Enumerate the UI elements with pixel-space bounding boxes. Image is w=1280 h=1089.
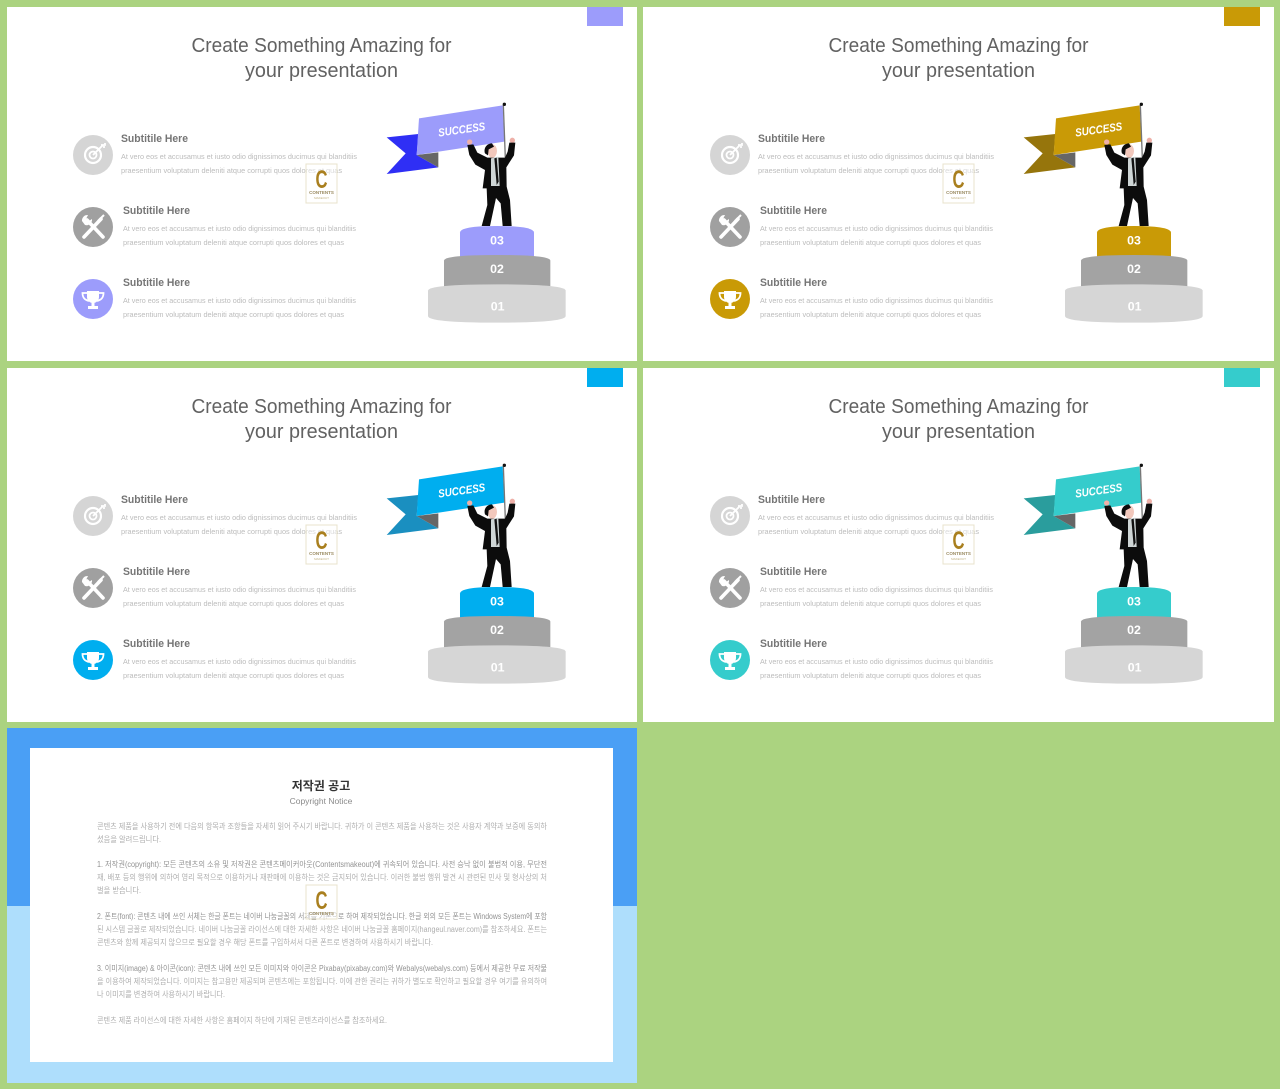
title: your presentation	[882, 60, 1035, 82]
text block: item 1	[758, 133, 994, 175]
person	[1104, 138, 1152, 226]
text block: item 2: praesentium voluptatum deleniti atque corrupti quos dolores et quas	[760, 599, 981, 608]
paragraph 2: font: 된 시스템 글꼴로 제작되었습니다. 네이버 나눔글꼴 라이선스에 대한 자세한 사항은 네이버 나눔글꼴 홈페이지(hangeul.naver.com)를 참조하세요. 폰트는	[97, 924, 547, 934]
step 03: 03	[490, 233, 504, 247]
text block: item 2: Subtitile Here	[123, 566, 190, 578]
watermark logo	[943, 164, 974, 203]
panel: slide 2 gold	[643, 7, 1274, 361]
notice heading	[290, 778, 353, 806]
illustration: podium with flag	[387, 103, 566, 323]
intro paragraph: 셨음을 알려드립니다.	[97, 834, 161, 844]
step 03	[460, 587, 534, 618]
panel: slide 4 teal	[643, 368, 1274, 722]
text block: item 2	[760, 205, 993, 247]
text block: item 2: At vero eos et accusamus et iusto odio dignissimos ducimus qui blanditiis	[760, 224, 993, 233]
title: your presentation	[245, 60, 398, 82]
paragraph 3: image and icon: 나 이미지를 변경하여 사용하시기 바랍니다.	[97, 989, 225, 999]
title	[828, 35, 1089, 82]
step 02: 02	[490, 262, 504, 276]
step 03	[1097, 587, 1171, 618]
text block: item 1: Subtitile Here	[758, 133, 825, 145]
panel: slide 3 blue	[7, 368, 637, 722]
person	[467, 138, 515, 226]
step 01	[1065, 284, 1203, 323]
flag	[1024, 464, 1143, 535]
text block: item 1: praesentium voluptatum deleniti atque corrupti quos dolores et quas	[758, 166, 979, 175]
text block: item 1	[121, 494, 357, 536]
step 03	[460, 226, 534, 257]
step 01: 01	[491, 300, 505, 314]
paragraph 1: copyright: 1. 저작권(copyright): 모든 콘텐츠의 소유 및 저작권은 콘텐츠메이커아웃(Contentsmakeout)에 귀속되어 있습니다. 사전 승낙 없이 불법적 이용, 무단전	[97, 859, 547, 869]
person	[1104, 499, 1152, 587]
text block: item 3: praesentium voluptatum deleniti atque corrupti quos dolores et quas	[760, 310, 981, 319]
paragraph 3: image and icon: 을 이용하여 제작되었습니다. 이미지는 참고용만 제공되며 콘텐츠에는 포함됩니다. 이에 관한 권리는 귀하가 별도로 확인하고 필요할 경우 여기를 유의하여	[97, 976, 547, 986]
step 02: 02	[490, 623, 504, 637]
step 03: 03	[1127, 594, 1141, 608]
text block: item 1: Subtitile Here	[121, 494, 188, 506]
text block: item 3	[760, 277, 993, 319]
title	[192, 396, 452, 443]
panel: slide 1 purple	[7, 7, 637, 361]
text block: item 3	[123, 638, 356, 680]
watermark logo: C	[316, 166, 328, 194]
icon: trophy	[710, 640, 750, 680]
watermark logo: C	[952, 166, 964, 194]
flag: SUCCESS	[1075, 121, 1123, 140]
watermark logo: C	[952, 527, 964, 555]
paragraph 3: image and icon: 3. 이미지(image) & 아이콘(icon): 콘텐츠 내에 쓰인 모든 이미지와 아이콘은 Pixabay(pixabay.com)와 Webalys(webalys.com) 등에서 제공한 무료 저작물	[97, 963, 547, 973]
title: Create Something Amazing for	[828, 396, 1089, 418]
watermark logo: CONTENTS	[309, 190, 334, 195]
text block: item 1: At vero eos et accusamus et iusto odio dignissimos ducimus qui blanditiis	[121, 152, 357, 161]
closing line: 콘텐츠 제품 라이선스에 대한 자세한 사항은 홈페이지 하단에 기재된 콘텐츠라이선스를 참조하세요.	[97, 1015, 387, 1025]
text block: item 3: At vero eos et accusamus et iusto odio dignissimos ducimus qui blanditiis	[123, 296, 356, 305]
icon: tools	[710, 568, 750, 608]
paragraph 2: font: 2. 폰트(font): 콘텐츠 내에 쓰인 서체는 한글 폰트는 네이버 나눔글꼴의 서체를 기본으로 하여 제작되었습니다. 한글 외의 모든 폰트는 Windows System에 포함	[97, 911, 548, 921]
title: Create Something Amazing for	[828, 35, 1089, 57]
icon: trophy	[710, 279, 750, 319]
text block: item 3: At vero eos et accusamus et iusto odio dignissimos ducimus qui blanditiis	[760, 657, 993, 666]
text block: item 2	[760, 566, 993, 608]
step 03	[1097, 226, 1171, 257]
text block: item 3: praesentium voluptatum deleniti atque corrupti quos dolores et quas	[123, 310, 344, 319]
illustration: podium with flag	[1024, 464, 1203, 684]
text block: item 3: Subtitile Here	[123, 638, 190, 650]
text block: item 3: Subtitile Here	[123, 277, 190, 289]
icon: target	[710, 135, 750, 175]
text block: item 2: praesentium voluptatum deleniti atque corrupti quos dolores et quas	[760, 238, 981, 247]
step 02	[444, 255, 550, 287]
watermark logo: C	[316, 887, 328, 915]
step 01	[428, 645, 566, 684]
icon: trophy	[73, 640, 113, 680]
title: Create Something Amazing for	[192, 35, 452, 57]
flag	[387, 464, 506, 535]
person	[467, 499, 515, 587]
text block: item 2: Subtitile Here	[760, 566, 827, 578]
step 02	[1081, 255, 1187, 287]
intro paragraph	[97, 821, 548, 844]
step 01	[1065, 645, 1203, 684]
watermark logo: MAKEOUT	[951, 557, 966, 561]
text block: item 2: Subtitile Here	[760, 205, 827, 217]
flag	[387, 103, 506, 174]
watermark logo: MAKEOUT	[951, 196, 966, 200]
accent tab	[1224, 368, 1260, 387]
illustration: podium with flag	[387, 464, 566, 684]
illustration: podium with flag	[1024, 103, 1203, 323]
watermark logo: MAKEOUT	[314, 196, 329, 200]
text block: item 1	[121, 133, 357, 175]
text block: item 3: praesentium voluptatum deleniti atque corrupti quos dolores et quas	[760, 671, 981, 680]
watermark logo: CONTENTS	[946, 551, 971, 556]
text block: item 2: Subtitile Here	[123, 205, 190, 217]
flag	[1024, 103, 1143, 174]
background bands	[7, 728, 637, 1083]
step 01: 01	[1128, 661, 1142, 675]
icon: tools	[73, 207, 113, 247]
intro paragraph: 콘텐츠 제품을 사용하기 전에 다음의 항목과 조항들을 자세히 읽어 주시기 바랍니다. 귀하가 이 콘텐츠 제품을 사용하는 것은 사용자 계약과 보증에 동의하	[97, 821, 548, 831]
notice heading: 저작권 공고	[292, 778, 350, 793]
text block: item 1: praesentium voluptatum deleniti atque corrupti quos dolores et quas	[121, 166, 342, 175]
step 01	[428, 284, 566, 323]
step 02: 02	[1127, 262, 1141, 276]
watermark logo	[306, 525, 337, 564]
text block: item 2	[123, 566, 356, 608]
watermark logo: CONTENTS	[946, 190, 971, 195]
title	[828, 396, 1089, 443]
text block: item 1: praesentium voluptatum deleniti atque corrupti quos dolores et quas	[758, 527, 979, 536]
icon: trophy	[73, 279, 113, 319]
icon: tools	[73, 568, 113, 608]
text block: item 3	[760, 638, 993, 680]
title: your presentation	[882, 421, 1035, 443]
text block: item 3: Subtitile Here	[760, 277, 827, 289]
paragraph 1: copyright: 재, 배포 등의 행위에 의하여 영리 목적으로 이용하거나 재판매에 이용하는 것은 금지되어 있습니다. 이러한 불법 행위 발견 시 관련된 민사 및 형사상의 처	[97, 872, 547, 882]
notice heading: Copyright Notice	[290, 796, 353, 806]
watermark logo: C	[316, 527, 328, 555]
watermark logo: CONTENTS	[309, 911, 334, 916]
step 02	[444, 616, 550, 648]
paragraph 1: copyright: 벌을 받습니다.	[97, 885, 141, 895]
text block: item 2: praesentium voluptatum deleniti atque corrupti quos dolores et quas	[123, 238, 344, 247]
step 03: 03	[1127, 233, 1141, 247]
flag: SUCCESS	[438, 482, 486, 501]
text block: item 2	[123, 205, 356, 247]
watermark logo	[306, 885, 337, 919]
paragraph 2: font	[97, 911, 548, 947]
text block: item 3: praesentium voluptatum deleniti atque corrupti quos dolores et quas	[123, 671, 344, 680]
text block: item 1: Subtitile Here	[758, 494, 825, 506]
icon: target	[73, 135, 113, 175]
flag: SUCCESS	[1075, 482, 1123, 501]
accent tab	[587, 368, 623, 387]
notice card	[30, 748, 613, 1062]
panel: copyright notice	[7, 728, 637, 1083]
watermark logo: MAKEOUT	[314, 557, 329, 561]
step 02: 02	[1127, 623, 1141, 637]
icon: target	[73, 496, 113, 536]
watermark logo	[943, 525, 974, 564]
text block: item 2: At vero eos et accusamus et iusto odio dignissimos ducimus qui blanditiis	[760, 585, 993, 594]
accent tab	[1224, 7, 1260, 26]
step 03: 03	[490, 594, 504, 608]
paragraph 2: font: 콘텐츠와 함께 제공되지 않으므로 필요할 경우 해당 폰트를 구입하셔서 다른 폰트로 변경하여 사용하시기 바랍니다.	[97, 937, 433, 947]
paragraph 3: image and icon	[97, 963, 547, 999]
text block: item 2: At vero eos et accusamus et iusto odio dignissimos ducimus qui blanditiis	[123, 224, 356, 233]
flag: SUCCESS	[438, 121, 486, 140]
text block: item 1	[758, 494, 994, 536]
text block: item 2: At vero eos et accusamus et iusto odio dignissimos ducimus qui blanditiis	[123, 585, 356, 594]
text block: item 2: praesentium voluptatum deleniti atque corrupti quos dolores et quas	[123, 599, 344, 608]
step 01: 01	[491, 661, 505, 675]
text block: item 3: At vero eos et accusamus et iusto odio dignissimos ducimus qui blanditiis	[123, 657, 356, 666]
accent tab	[587, 7, 623, 26]
title: your presentation	[245, 421, 398, 443]
title	[192, 35, 452, 82]
step 02	[1081, 616, 1187, 648]
text block: item 1: At vero eos et accusamus et iusto odio dignissimos ducimus qui blanditiis	[121, 513, 357, 522]
title: Create Something Amazing for	[192, 396, 452, 418]
step 01: 01	[1128, 300, 1142, 314]
paragraph 1: copyright	[97, 859, 547, 895]
text block: item 1: At vero eos et accusamus et iusto odio dignissimos ducimus qui blanditiis	[758, 152, 994, 161]
text block: item 1: praesentium voluptatum deleniti atque corrupti quos dolores et quas	[121, 527, 342, 536]
icon: tools	[710, 207, 750, 247]
text block: item 3: Subtitile Here	[760, 638, 827, 650]
icon: target	[710, 496, 750, 536]
watermark logo	[306, 164, 337, 203]
text block: item 1: Subtitile Here	[121, 133, 188, 145]
watermark logo: CONTENTS	[309, 551, 334, 556]
text block: item 3: At vero eos et accusamus et iusto odio dignissimos ducimus qui blanditiis	[760, 296, 993, 305]
text block: item 1: At vero eos et accusamus et iusto odio dignissimos ducimus qui blanditiis	[758, 513, 994, 522]
text block: item 3	[123, 277, 356, 319]
